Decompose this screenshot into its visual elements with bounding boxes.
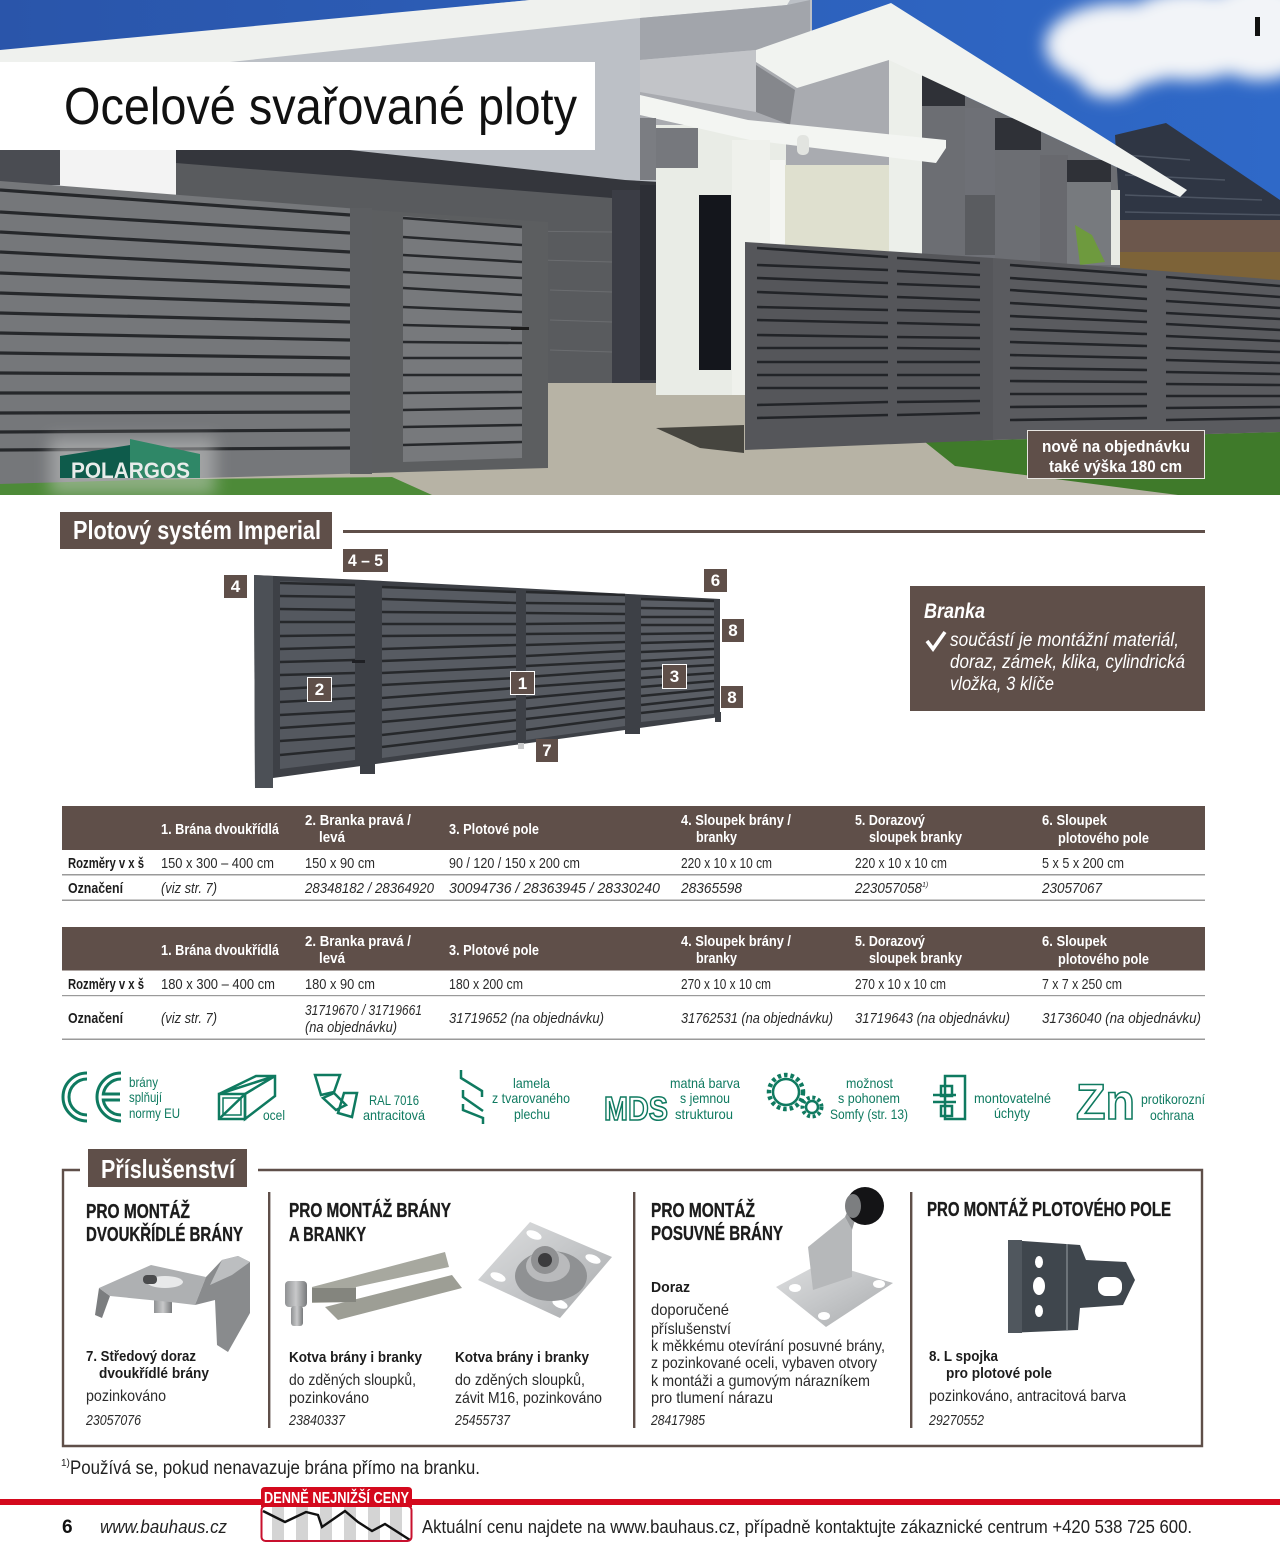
column: fence panel: [927, 1197, 1171, 1429]
table: height 180: 31719670 / 31719661: [305, 1003, 422, 1019]
table: height 150: 23057067: [1041, 881, 1103, 897]
panel: Branka: doraz, zámek, klika, cylindrická: [950, 652, 1185, 673]
panel: Příslušenství: Příslušenství: [101, 1154, 236, 1184]
logo: Polargos: POLARGOS: [71, 458, 190, 483]
icon: steel profile: ocel: [263, 1107, 285, 1123]
table: height 180: 31736040 (na objednávku): [1042, 1011, 1201, 1027]
icon: shaped slat: [461, 1070, 570, 1124]
table: height 150: 5. Dorazový: [855, 812, 926, 829]
footnote: 1): [61, 1458, 70, 1469]
footer red rule: [0, 1499, 1280, 1505]
callout: new height: [1028, 430, 1204, 478]
fence diagram: [254, 575, 721, 788]
column: sliding gate: příslušenství: [651, 1321, 731, 1338]
table: height 150: (viz str. 7): [161, 881, 217, 897]
table: height 180: Označení: [68, 1010, 124, 1027]
number badges on diagram: 8: [727, 688, 737, 707]
table: height 150: branky: [696, 829, 738, 846]
table: height 180: sloupek branky: [869, 950, 963, 967]
column: gate and wicket: pozinkováno: [289, 1390, 369, 1407]
logo: daily lowest prices: [261, 1487, 412, 1541]
table: height 180: 7 x 7 x 250 cm: [1042, 977, 1122, 993]
table: height 180: 3. Plotové pole: [449, 942, 539, 959]
column: sliding gate: PRO MONTÁŽ: [651, 1198, 755, 1222]
table: height 150: 90 / 120 / 150 x 200 cm: [449, 856, 580, 872]
icon: Zn corrosion protection: Zn: [1076, 1074, 1135, 1130]
logo: Polargos: [50, 438, 215, 495]
column: fence panel: pro plotové pole: [946, 1365, 1052, 1382]
callout: new height: nově na objednávku: [1042, 437, 1190, 456]
number badges on diagram: 4: [231, 577, 241, 596]
column: gate and wicket: PRO MONTÁŽ BRÁNY: [289, 1198, 452, 1222]
panel: Příslušenství: [63, 1149, 1202, 1446]
image: rubber gate stop: [776, 1187, 893, 1327]
icon: Zn corrosion protection: [1076, 1074, 1205, 1130]
table: height 180: 2. Branka pravá /: [305, 933, 412, 950]
column: double-leaf gate: [85, 1199, 250, 1429]
panel: Branka: Branka: [924, 600, 985, 623]
table: height 150: Rozměry v x š: [68, 855, 144, 872]
table: height 180: (na objednávku): [305, 1020, 397, 1036]
icon: MDS matte finish: MDS: [604, 1090, 668, 1127]
table: height 180: 4. Sloupek brány /: [681, 933, 792, 950]
column: double-leaf gate: 7. Středový doraz: [86, 1348, 196, 1365]
corner mark: [1255, 17, 1260, 36]
column: gate and wicket: 23840337: [288, 1413, 346, 1429]
icon: MDS matte finish: matná barva: [670, 1075, 740, 1091]
heading: Plotový systém Imperial: Plotový systém Imperial: [73, 515, 321, 545]
icon: Zn corrosion protection: protikorozní: [1141, 1091, 1205, 1107]
column: fence panel: 8. L spojka: [929, 1348, 999, 1365]
table: height 180: 31719652 (na objednávku): [449, 1011, 604, 1027]
table: height 180: 180 x 200 cm: [449, 977, 523, 993]
number badges on diagram: 8: [728, 621, 738, 640]
column: gate and wicket: A BRANKY: [289, 1224, 366, 1246]
title banner: Ocelové svařované ploty: [64, 78, 577, 136]
column: gate and wicket: závit M16, pozinkováno: [455, 1390, 602, 1407]
column: sliding gate: POSUVNÉ BRÁNY: [651, 1222, 783, 1245]
footer: page number and url: www.bauhaus.cz: [100, 1517, 227, 1537]
footnote: Používá se, pokud nenavazuje brána přímo na branku.: [70, 1458, 480, 1479]
icon: mounting brackets: [933, 1076, 1051, 1121]
table: height 180: 180 x 90 cm: [305, 977, 375, 993]
column: double-leaf gate: dvoukřídlé brány: [99, 1365, 210, 1382]
table: height 180: 31762531 (na objednávku): [681, 1011, 833, 1027]
column: gate and wicket: do zděných sloupků,: [455, 1371, 585, 1389]
icon: RAL colour fan: [315, 1075, 425, 1123]
column: fence panel: 29270552: [928, 1413, 984, 1429]
table: height 180: 6. Sloupek: [1042, 933, 1108, 950]
column: gate and wicket: Kotva brány i branky: [455, 1349, 590, 1366]
number badges on diagram: 2: [315, 680, 324, 699]
table: height 180: 270 x 10 x 10 cm: [681, 977, 771, 993]
callout: new height: také výška 180 cm: [1049, 457, 1182, 476]
column: gate and wicket: do zděných sloupků,: [289, 1371, 416, 1389]
number badges on diagram: 1: [518, 674, 527, 693]
footer: contact note: Aktuální cenu najdete na www.bauhaus.cz, případně kontaktujte zákaznické centrum +420 538 725 600.: [422, 1517, 1192, 1537]
table: height 180: Rozměry v x š: [68, 976, 144, 993]
image: gate anchor: [285, 1252, 462, 1326]
column: sliding gate: Doraz: [651, 1279, 690, 1296]
table: height 180: plotového pole: [1058, 951, 1149, 968]
icon: steel profile: [219, 1076, 285, 1123]
table: height 150: 5 x 5 x 200 cm: [1042, 856, 1124, 872]
icon: mounting brackets: úchyty: [994, 1105, 1030, 1121]
table: height 180: 270 x 10 x 10 cm: [855, 977, 946, 993]
number badges on diagram: 7: [542, 741, 552, 760]
table: height 150: 28348182 / 28364920: [304, 881, 434, 897]
table: height 180: 5. Dorazový: [855, 933, 926, 950]
number badges on diagram: 4 – 5: [348, 551, 383, 570]
table: height 180: 180 x 300 – 400 cm: [161, 977, 275, 993]
hero photo: house with steel fence: [0, 0, 1280, 495]
table: height 150: 6. Sloupek: [1042, 812, 1108, 829]
column: sliding gate: [650, 1187, 893, 1429]
column: sliding gate: k měkkému otevírání posuvné brány,: [651, 1338, 885, 1355]
icon: RAL colour fan: RAL 7016: [369, 1092, 419, 1108]
column: fence panel: PRO MONTÁŽ PLOTOVÉHO POLE: [927, 1197, 1171, 1221]
table: height 150: Označení: [68, 880, 124, 897]
column: double-leaf gate: 23057076: [85, 1413, 142, 1429]
icon: shaped slat: lamela: [513, 1075, 550, 1091]
icon: gears: s pohonem: [838, 1090, 900, 1106]
icon: MDS matte finish: s jemnou: [680, 1090, 730, 1106]
table: height 150: 4. Sloupek brány /: [681, 812, 792, 829]
icon: MDS matte finish: [604, 1075, 740, 1127]
icon: shaped slat: plechu: [514, 1106, 550, 1122]
icon: CE norms: brány: [129, 1074, 158, 1090]
image: centre stop bracket: [95, 1256, 250, 1352]
table: height 150: sloupek branky: [869, 829, 963, 846]
hero: pedestrian gate: [372, 210, 548, 473]
panel: Branka: vložka, 3 klíče: [950, 674, 1054, 695]
table: height 150: 220 x 10 x 10 cm: [681, 856, 772, 872]
title banner: [0, 62, 595, 150]
table: height 180: levá: [319, 950, 346, 967]
table: height 150: 220 x 10 x 10 cm: [855, 856, 947, 872]
table: height 150: [62, 806, 1205, 901]
number badges on diagram: 3: [670, 667, 679, 686]
table: height 180: branky: [696, 950, 738, 967]
icon: CE norms: normy EU: [129, 1105, 180, 1121]
column: gate and wicket: 25455737: [454, 1413, 511, 1429]
column: sliding gate: k montáži a gumovým nárazníkem: [651, 1373, 870, 1390]
column: double-leaf gate: pozinkováno: [86, 1388, 166, 1405]
column: sliding gate: 28417985: [650, 1413, 706, 1429]
icon: mounting brackets: montovatelné: [974, 1090, 1051, 1106]
table: height 150: levá: [319, 829, 346, 846]
icon: RAL colour fan: antracitová: [363, 1107, 425, 1123]
panel: Branka: součástí je montážní materiál,: [950, 630, 1179, 651]
icon: Zn corrosion protection: ochrana: [1150, 1107, 1194, 1123]
table: height 150: 150 x 300 – 400 cm: [161, 856, 274, 872]
icon: gears: Somfy (str. 13): [830, 1106, 908, 1122]
table: height 180: 31719643 (na objednávku): [855, 1011, 1010, 1027]
column: fence panel: pozinkováno, antracitová barva: [929, 1388, 1126, 1405]
column: sliding gate: z pozinkované oceli, vybaven otvory: [651, 1355, 877, 1372]
column: double-leaf gate: PRO MONTÁŽ: [86, 1199, 190, 1223]
icon: CE norms: [66, 1074, 180, 1121]
footer: page number and url: 6: [62, 1517, 73, 1538]
table: height 180: 1. Brána dvoukřídlá: [161, 942, 280, 959]
table: height 150: 1. Brána dvoukřídlá: [161, 821, 280, 838]
table: height 150: 223057058: [854, 881, 922, 897]
column: gate and wicket: Kotva brány i branky: [289, 1349, 423, 1366]
number badges on diagram: 6: [711, 571, 720, 590]
column: gate and wicket: [285, 1198, 612, 1429]
image: L connector: [1008, 1240, 1135, 1333]
hero: right fence panels: [745, 242, 1280, 450]
table: height 150: 2. Branka pravá /: [305, 812, 412, 829]
number badges on diagram: [224, 549, 744, 762]
table: height 150: 30094736 / 28363945 / 28330240: [449, 881, 660, 897]
table: height 150: 28365598: [680, 881, 742, 897]
column: sliding gate: pro tlumení nárazu: [651, 1390, 773, 1407]
column: sliding gate: doporučené: [651, 1302, 729, 1319]
table: height 150: plotového pole: [1058, 830, 1149, 847]
icon: MDS matte finish: strukturou: [675, 1106, 733, 1122]
icon: gears: možnost: [846, 1075, 893, 1091]
icon: shaped slat: z tvarovaného: [492, 1090, 570, 1106]
icon: CE norms: splňují: [129, 1089, 162, 1105]
icon: gears: [769, 1075, 908, 1122]
image: threaded plate: [478, 1222, 612, 1318]
column: double-leaf gate: DVOUKŘÍDLÉ BRÁNY: [86, 1222, 243, 1246]
table: height 180: (viz str. 7): [161, 1011, 217, 1027]
table: height 150: 150 x 90 cm: [305, 856, 375, 872]
hero: left fence panel: [0, 181, 372, 484]
heading: Plotový systém Imperial: [60, 512, 1205, 549]
panel: Branka: [910, 586, 1205, 711]
table: height 180: [62, 927, 1205, 1040]
table: height 150: 3. Plotové pole: [449, 821, 539, 838]
logo: daily lowest prices: DENNĚ NEJNIŽŠÍ CENY: [264, 1488, 409, 1507]
table: height 150: 1): [922, 882, 928, 889]
